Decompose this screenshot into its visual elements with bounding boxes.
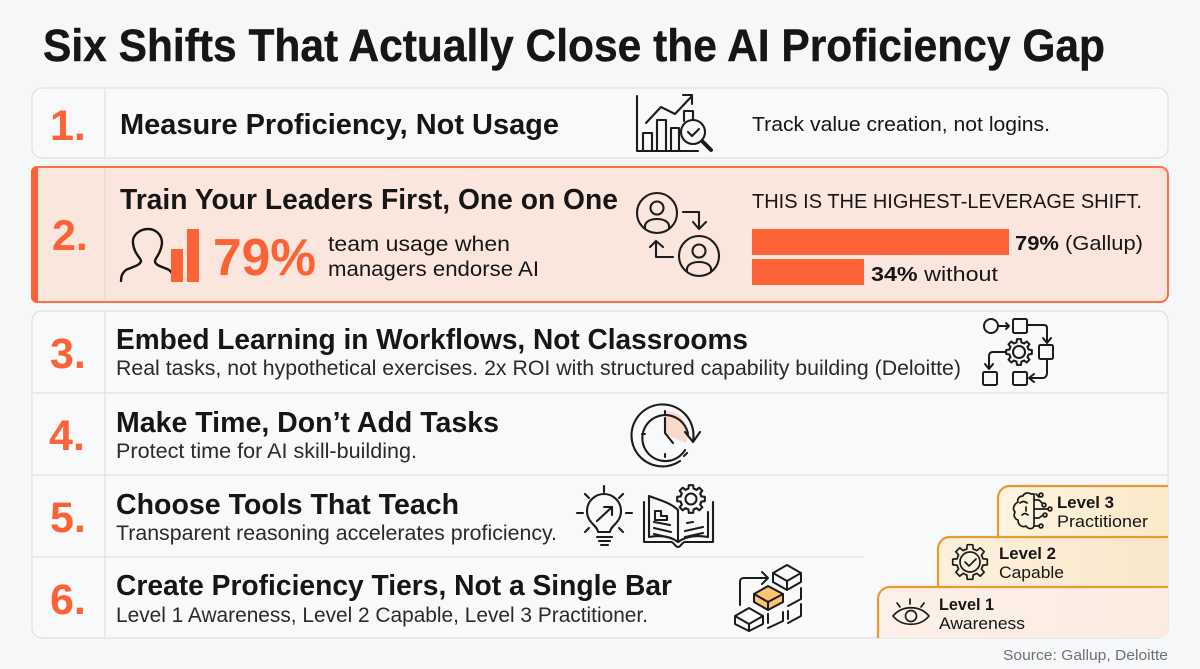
stat caption: managers endorse AI [328, 258, 539, 281]
row 6: Level 1 Awareness, Level 2 Capable, Level 3 Practitioner. [116, 604, 648, 627]
row 4: Protect time for AI skill-building. [116, 440, 417, 463]
level 2 step: Capable [999, 563, 1064, 582]
heading 2: Train Your Leaders First, One on One [120, 184, 618, 216]
level 2 step: Level 2 [999, 544, 1056, 563]
row 6 [50, 565, 801, 631]
row 3: 3. [50, 330, 86, 378]
description 1: Track value creation, not logins. [752, 114, 1050, 136]
number 1: 1. [50, 102, 86, 150]
icon: workflow gear [983, 319, 1053, 385]
icon: chart with magnifier [637, 95, 711, 151]
row 3 [50, 319, 1053, 385]
bar chart: manager endorsement: 34% without [871, 264, 999, 286]
row 3: Real tasks, not hypothetical exercises. 2x ROI with structured capability building (Deloitte) [116, 357, 961, 380]
level 1 step: Level 1 [939, 595, 994, 614]
row 5: Choose Tools That Teach [116, 489, 459, 521]
row 4: Make Time, Don’t Add Tasks [116, 407, 499, 439]
level 1 step: Awareness [939, 614, 1025, 633]
level 2 step [938, 537, 1168, 587]
row 5 [50, 485, 713, 547]
icon: book with gear [644, 485, 713, 547]
number 2: 2. [52, 212, 88, 260]
icon: brain [1014, 493, 1052, 529]
level 3 step: Level 3 [1057, 493, 1114, 512]
row 6: 6. [50, 576, 86, 624]
panel: shift 1 [32, 88, 1168, 158]
highest leverage label: THIS IS THE HIGHEST-LEVERAGE SHIFT. [752, 191, 1142, 213]
row 4: 4. [49, 412, 85, 460]
panel: shift 2 highlighted [31, 166, 1168, 303]
bar chart: manager endorsement [752, 229, 1143, 286]
level 3 step: Practitioner [1057, 512, 1148, 531]
icon: person with bars [121, 229, 199, 282]
row 6: Create Proficiency Tiers, Not a Single Bar [116, 570, 672, 602]
panel: shifts 3 to 6 [32, 311, 1168, 638]
icon: lightbulb [577, 486, 632, 545]
icon: gear check [953, 545, 987, 579]
stat caption: team usage when [328, 233, 510, 256]
icon: two people exchange [637, 193, 719, 276]
level 1 step [878, 587, 1168, 638]
title: Six Shifts That Actually Close the AI Proficiency Gap [43, 20, 1105, 71]
bar chart: manager endorsement: 79% (Gallup) [1015, 233, 1143, 255]
icon: eye [893, 599, 929, 624]
row 3: Embed Learning in Workflows, Not Classrooms [116, 324, 748, 356]
row 5: 5. [50, 494, 86, 542]
icon: stacked cubes [735, 565, 801, 631]
heading 1: Measure Proficiency, Not Usage [120, 109, 559, 141]
tier staircase [878, 486, 1168, 638]
level 3 step [998, 486, 1168, 536]
row 4 [49, 404, 700, 466]
row 5: Transparent reasoning accelerates proficiency. [116, 522, 557, 545]
stat 79%: 79% [213, 229, 316, 287]
source note: Source: Gallup, Deloitte [1003, 647, 1168, 664]
icon: clock [632, 404, 700, 466]
